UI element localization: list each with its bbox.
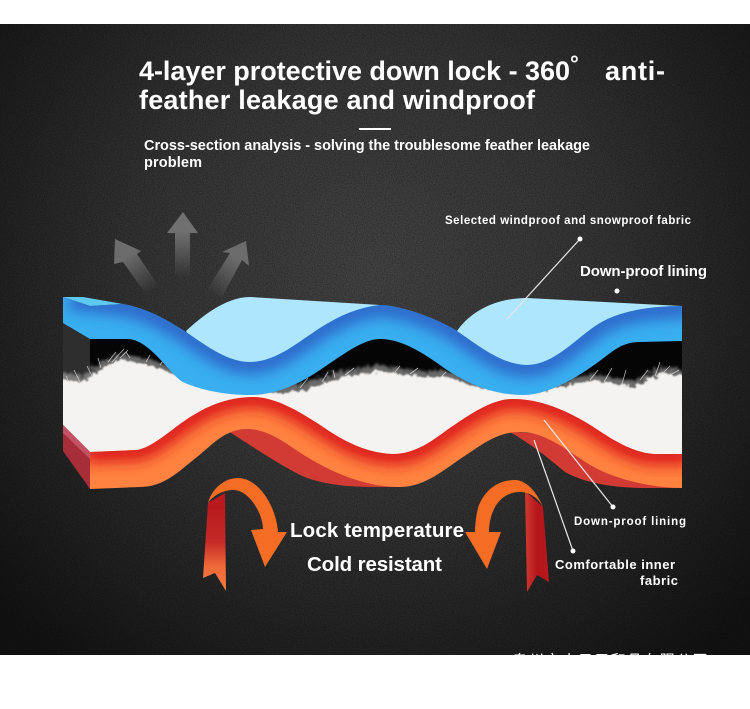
leader line: windproof fabric [507, 236, 582, 319]
icon: right curved arrow [465, 480, 549, 592]
label: selected windproof fabric: Selected windproof and snowproof fabric [445, 215, 692, 227]
subtitle: Cross-section analysis - solving the troublesome feather leakage [144, 138, 590, 154]
left side of inner fabric [63, 425, 90, 489]
outer fabric light-blue panels [186, 297, 682, 380]
title: ° [570, 51, 579, 76]
subtitle: problem [144, 155, 202, 171]
icon: left curved arrow [203, 478, 287, 591]
title: 4-layer protective down lock - 360 [139, 56, 570, 86]
label: comfortable inner fabric: fabric [640, 573, 678, 588]
label: comfortable inner fabric: Comfortable inner [555, 557, 675, 572]
blue down-proof lining band [63, 297, 682, 395]
label: down-proof lining bottom: Down-proof lining [574, 516, 686, 528]
top face of blue layer [63, 297, 123, 306]
label: lock temperature: Lock temperature [290, 519, 464, 542]
label: down-proof lining top: Down-proof lining [580, 263, 707, 280]
marker dot: down-proof lining top [614, 288, 620, 294]
icon: heat escaping arrows [114, 212, 249, 297]
red and orange inner lining band [85, 395, 690, 491]
heading divider [359, 128, 391, 130]
cross-section diagram [55, 290, 690, 491]
title: feather leakage and windproof [139, 85, 536, 115]
left side of cavity [63, 323, 90, 400]
label: cold resistant: Cold resistant [307, 553, 442, 576]
title [139, 51, 665, 115]
title: anti- [605, 56, 665, 86]
label: comfortable inner fabric [555, 557, 678, 588]
leader line: lower down-proof lining [544, 420, 616, 510]
inner fabric underside [228, 425, 682, 488]
clipped company name at bottom: 泉州市小日子和品有限公司 [512, 652, 708, 670]
leader line: comfortable inner fabric [534, 440, 576, 554]
down feather filling [63, 348, 682, 454]
black air cavity [90, 336, 682, 400]
white bottom margin [0, 655, 750, 709]
subtitle [144, 138, 590, 171]
